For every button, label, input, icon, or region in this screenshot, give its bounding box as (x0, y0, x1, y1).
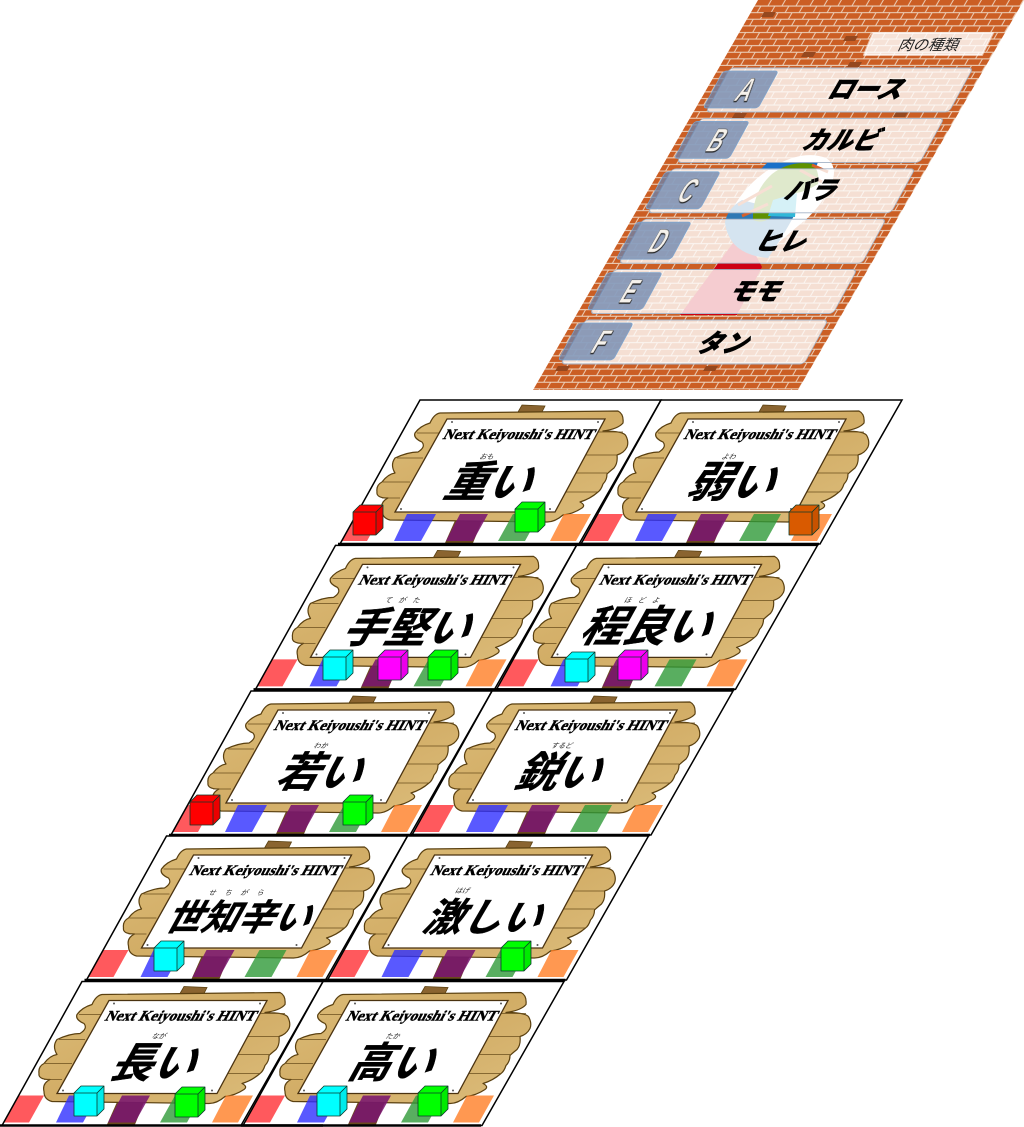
card: 手堅い (254, 545, 576, 689)
row D: D (641, 224, 676, 260)
row A: A (728, 73, 764, 109)
cube: red, row 1 (353, 505, 383, 535)
adjective: 鋭い (508, 749, 618, 796)
card frame (328, 836, 648, 980)
row F: F (585, 325, 617, 361)
row B (674, 118, 944, 162)
hint heading: Next Keiyoushi's HINT (343, 1008, 502, 1024)
row E: E (613, 274, 647, 310)
cube: magenta, row 2 right (618, 650, 648, 680)
hint heading: Next Keiyoushi's HINT (512, 718, 671, 734)
row C: バラ (780, 177, 846, 205)
hint heading: Next Keiyoushi's HINT (427, 863, 587, 879)
cube: green, row 1 (515, 502, 545, 532)
cube: red, row 3 (190, 795, 220, 825)
card bottom edge (579, 543, 819, 545)
row A: ロース (823, 76, 913, 104)
cube: green, row 5 right (418, 1086, 448, 1116)
row F: タン (692, 330, 758, 358)
ruby: せちがら (207, 888, 276, 897)
hint heading: Next Keiyoushi's HINT (440, 427, 599, 443)
row E: モモ (724, 278, 790, 306)
row C: C (670, 174, 706, 209)
adjective: 世知辛い (159, 898, 325, 938)
row B: B (699, 123, 734, 159)
ruby: わか (312, 741, 331, 750)
header tab: 肉の種類 (895, 37, 963, 54)
card frame (171, 691, 492, 835)
card bottom edge (338, 543, 661, 545)
adjective: 激しい (416, 896, 558, 939)
ruby: てがた (383, 595, 430, 604)
dark accent bricks (555, 12, 908, 371)
card: 長い (0, 982, 323, 1126)
brick wall background (533, 0, 1024, 390)
hint heading: Next Keiyoushi's HINT (102, 1008, 261, 1024)
card bottom edge (494, 688, 734, 691)
cube: cyan, row 5 right (317, 1086, 347, 1116)
ruby: はげ (453, 886, 473, 895)
header tab (864, 33, 993, 55)
ruby: するど (549, 741, 576, 750)
card bottom edge (254, 688, 576, 691)
card bottom edge (241, 1124, 481, 1127)
card frame (496, 545, 818, 689)
row F (558, 320, 828, 364)
card: 激しい (326, 836, 648, 980)
card frame (412, 691, 733, 835)
adjective: 程良い (573, 602, 729, 651)
hint heading: Next Keiyoushi's HINT (355, 572, 515, 588)
cube: orange, row 1 (789, 505, 819, 535)
card frame (243, 982, 564, 1126)
row D (616, 219, 886, 263)
card: 程良い (494, 545, 818, 689)
cube: magenta, row 2 (378, 650, 408, 680)
row B: カルビ (797, 126, 889, 155)
hint heading: Next Keiyoushi's HINT (681, 427, 840, 443)
card frame (2, 982, 323, 1126)
card frame (340, 400, 661, 544)
card bottom edge (0, 1124, 323, 1127)
card bottom edge (84, 979, 408, 981)
cube: green, row 4 right (501, 941, 531, 971)
faded character illustration (680, 155, 834, 315)
ruby: ほどよ (622, 596, 669, 604)
card bottom edge (326, 979, 566, 981)
adjective: 重い (437, 458, 550, 506)
card: 重い (338, 400, 661, 544)
ruby: たか (384, 1032, 403, 1040)
adjective: 弱い (680, 458, 793, 506)
panel: brick wall with meat types (533, 0, 1024, 390)
hint heading: Next Keiyoushi's HINT (596, 572, 756, 588)
card: 世知辛い (84, 836, 408, 980)
hint heading: Next Keiyoushi's HINT (186, 863, 346, 879)
card: 鋭い (410, 691, 733, 835)
row E (587, 270, 857, 314)
cube: green, row 2 (428, 650, 458, 680)
row C (645, 169, 915, 213)
row D: ヒレ (750, 228, 816, 256)
adjective: 若い (269, 749, 379, 796)
cube: cyan, row 2 (323, 650, 353, 680)
cube: green, row 3 (343, 795, 373, 825)
cube: cyan, row 2 right (565, 652, 595, 682)
card: 若い (169, 691, 492, 835)
row A (703, 68, 973, 112)
card bottom edge (169, 834, 492, 836)
ruby: よわ (720, 452, 739, 461)
cube: cyan, row 4 (154, 941, 184, 971)
card frame (86, 836, 408, 980)
card: 弱い (579, 400, 902, 544)
cube: green, row 5 (175, 1087, 205, 1117)
card frame (256, 545, 576, 689)
ruby: なが (150, 1031, 170, 1040)
adjective: 手堅い (335, 604, 488, 652)
hint heading: Next Keiyoushi's HINT (271, 718, 430, 734)
cube: cyan, row 5 (74, 1086, 104, 1116)
card frame (581, 400, 902, 544)
card: 高い (241, 982, 564, 1126)
card bottom edge (410, 834, 650, 836)
ruby: おも (478, 452, 497, 461)
adjective: 高い (341, 1039, 451, 1087)
adjective: 長い (103, 1039, 213, 1087)
